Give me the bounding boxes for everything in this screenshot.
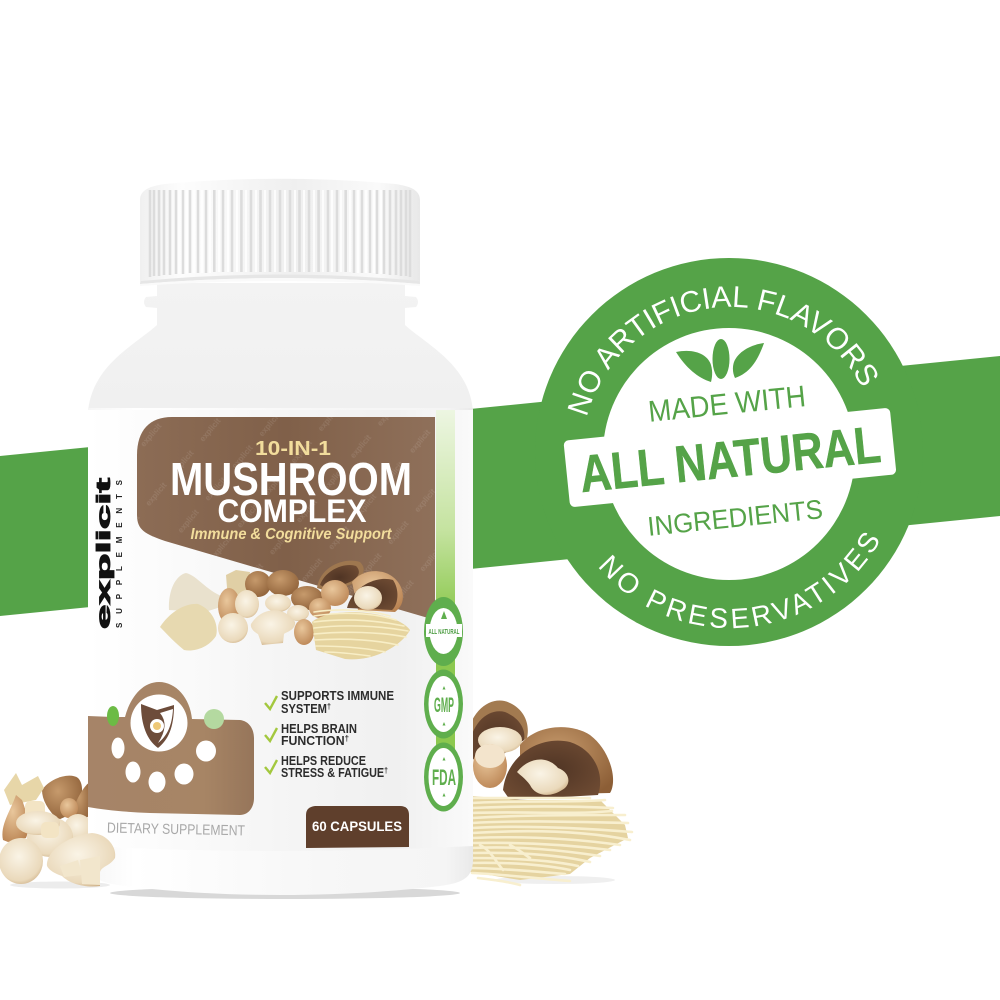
seal: fda: FDA	[432, 765, 456, 790]
mushrooms right of bottle	[465, 700, 632, 885]
check list: †	[345, 734, 349, 743]
label mushroom cluster	[160, 561, 410, 659]
seal: all natural: ALL NATURAL	[428, 627, 460, 636]
text: 10-in-1: 10-IN-1	[255, 438, 331, 460]
icon: shield	[141, 704, 174, 748]
arc text: no preservatives: NO PRESERVATIVES	[598, 532, 878, 628]
watermark pattern	[137, 417, 435, 620]
brown bottom panel	[88, 682, 254, 815]
seal: fda	[424, 742, 463, 812]
capsules tag: 60 CAPSULES	[312, 819, 402, 834]
badge: all natural	[542, 258, 909, 646]
check list: SYSTEM	[281, 702, 332, 716]
capsules tag	[306, 806, 409, 848]
text: immune and cognitive support: Immune & Cognitive Support	[190, 526, 392, 543]
seal: gmp: GMP	[434, 694, 454, 717]
bottle	[88, 179, 473, 899]
text: all natural: ALL NATURAL	[577, 416, 883, 504]
seal: all natural	[424, 597, 463, 666]
check list: SUPPORTS IMMUNE	[281, 689, 394, 703]
text: made with: MADE WITH	[647, 380, 807, 429]
text: dietary supplement: DIETARY SUPPLEMENT	[107, 821, 245, 839]
text: complex: COMPLEX	[218, 493, 367, 529]
neck and shoulder	[88, 283, 473, 412]
green strip	[436, 410, 455, 785]
bottle shadow	[110, 887, 460, 899]
brand: supplements: SUPPLEMENTS	[115, 479, 124, 628]
text: ingredients: INGREDIENTS	[646, 494, 824, 542]
check list: FUNCTION	[281, 734, 346, 748]
text: mushroom: MUSHROOM	[170, 453, 412, 505]
seal: gmp	[424, 670, 463, 738]
arc text: no artificial flavors: NO ARTIFICIAL FLAVORS	[568, 286, 878, 415]
check list: HELPS BRAIN	[281, 722, 357, 736]
icon: leaves	[676, 339, 764, 382]
white dots	[112, 738, 216, 792]
check list: †	[327, 702, 331, 711]
cap	[140, 179, 420, 286]
white circle	[130, 694, 188, 752]
check list: STRESS & FATIGUE	[281, 766, 400, 780]
white ribbon	[563, 408, 896, 507]
green diagonal band	[0, 356, 1000, 616]
brand: explicit: explicit	[94, 476, 115, 629]
check list	[265, 689, 394, 780]
mushrooms left of bottle (behind)	[2, 773, 92, 857]
bottle body	[88, 408, 473, 895]
enoki strands	[470, 796, 628, 880]
brown title panel	[137, 417, 435, 620]
check list: HELPS REDUCE	[281, 754, 366, 768]
check list: †	[384, 766, 388, 775]
mushrooms left front	[0, 833, 115, 888]
green dots	[107, 706, 119, 726]
label background	[88, 410, 473, 851]
